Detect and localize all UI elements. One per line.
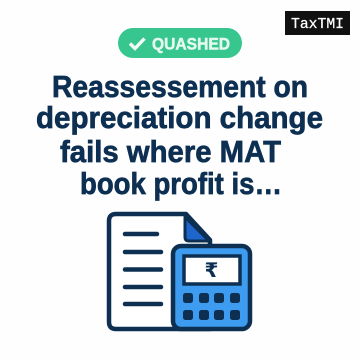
icon: calculator: ₹ bbox=[205, 258, 218, 282]
icon: calculator bbox=[173, 246, 250, 329]
title bbox=[36, 69, 323, 201]
watermark: TaxTMI: TaxTMI bbox=[291, 16, 344, 33]
badge: quashed bbox=[118, 28, 242, 58]
title: Reassessement on bbox=[52, 69, 308, 104]
icon: document bbox=[109, 214, 210, 329]
icon: document and calculator bbox=[109, 214, 250, 329]
title: depreciation change bbox=[36, 100, 323, 135]
watermark: TaxTMI bbox=[285, 11, 350, 35]
title: book profit is… bbox=[80, 166, 282, 201]
title: fails where MAT bbox=[60, 134, 281, 169]
badge: quashed: QUASHED bbox=[152, 34, 230, 54]
